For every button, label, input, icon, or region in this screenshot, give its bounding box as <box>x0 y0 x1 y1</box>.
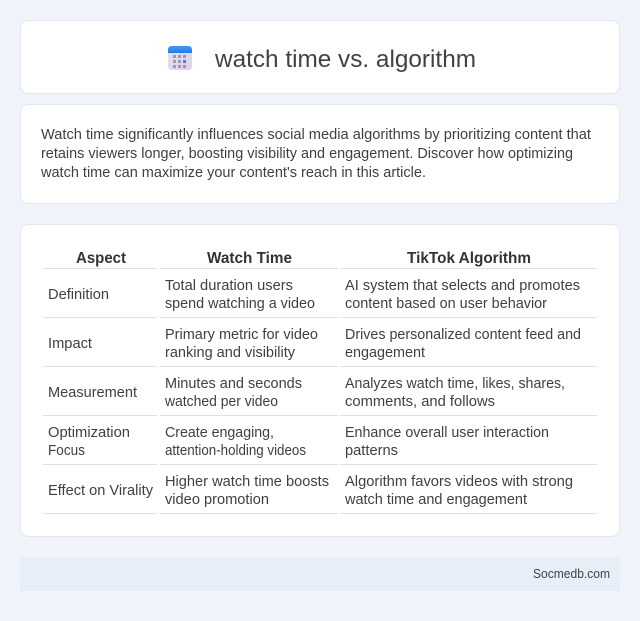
row: optimization focus: Enhance overall user interaction <box>345 425 549 441</box>
row: effect on virality <box>48 474 573 508</box>
row: optimization focus: Create engaging, <box>165 425 274 441</box>
row: measurement: comments, and follows <box>345 394 495 410</box>
row: definition: content based on user behavior <box>345 296 547 312</box>
row: definition: AI system that selects and promotes <box>345 278 580 294</box>
panel: description: Watch time significantly influences social media algorithms by prioritizing content that <box>41 127 591 143</box>
row: definition <box>48 278 580 312</box>
row: impact <box>48 327 581 361</box>
row: optimization focus <box>48 425 549 459</box>
row: optimization focus: Focus <box>48 443 85 459</box>
panel: description: retains viewers longer, boosting visibility and engagement. Discover how optimizing <box>41 146 573 162</box>
table header <box>76 250 531 267</box>
row: measurement: Measurement <box>48 385 137 401</box>
row: definition: Total duration users <box>165 278 293 294</box>
row: definition: spend watching a video <box>165 296 315 312</box>
panel: description <box>20 104 620 204</box>
panel: description: watch time can maximize your content's reach in this article. <box>40 165 426 181</box>
table header: TikTok Algorithm <box>407 250 531 267</box>
row: effect on virality: Algorithm favors videos with strong <box>345 474 573 490</box>
row: impact: Primary metric for video <box>165 327 318 343</box>
title card <box>20 20 620 94</box>
row: definition: Definition <box>48 287 109 303</box>
row: impact: Impact <box>48 336 92 352</box>
table header: Watch Time <box>207 250 292 267</box>
icon: calendar <box>168 46 192 70</box>
footer <box>20 557 620 591</box>
row: optimization focus: Optimization <box>48 425 130 441</box>
row: effect on virality: Higher watch time boosts <box>165 474 329 490</box>
row: measurement: watched per video <box>164 394 278 410</box>
footer: Socmedb.com <box>533 567 610 581</box>
panel: comparison table <box>20 224 620 536</box>
row: effect on virality: video promotion <box>165 492 269 508</box>
row: measurement <box>48 376 565 410</box>
row: optimization focus: attention-holding videos <box>165 443 306 459</box>
row: effect on virality: Effect on Virality <box>48 483 154 499</box>
row: impact: ranking and visibility <box>165 345 296 361</box>
table header: Aspect <box>76 250 126 267</box>
row: impact: Drives personalized content feed and <box>345 327 581 343</box>
title: watch time vs. algorithm <box>214 46 476 73</box>
row: effect on virality: watch time and engagement <box>344 492 527 508</box>
row: impact: engagement <box>345 345 425 361</box>
row: measurement: Analyzes watch time, likes, shares, <box>345 376 565 392</box>
row: measurement: Minutes and seconds <box>165 376 302 392</box>
row: optimization focus: patterns <box>345 443 398 459</box>
